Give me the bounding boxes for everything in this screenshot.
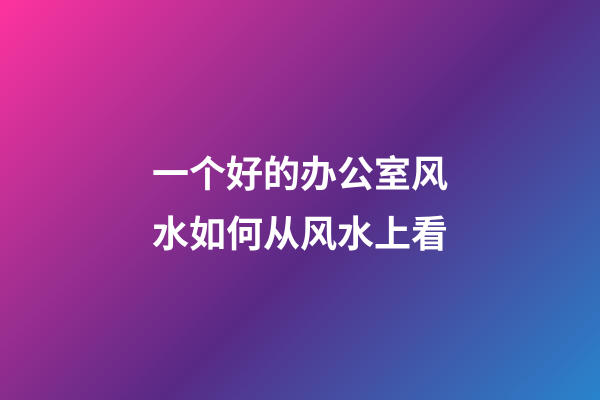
- title: [152, 154, 448, 255]
- title: 一个好的办公室风: [152, 154, 448, 195]
- title: 水如何从风水上看: [152, 214, 448, 255]
